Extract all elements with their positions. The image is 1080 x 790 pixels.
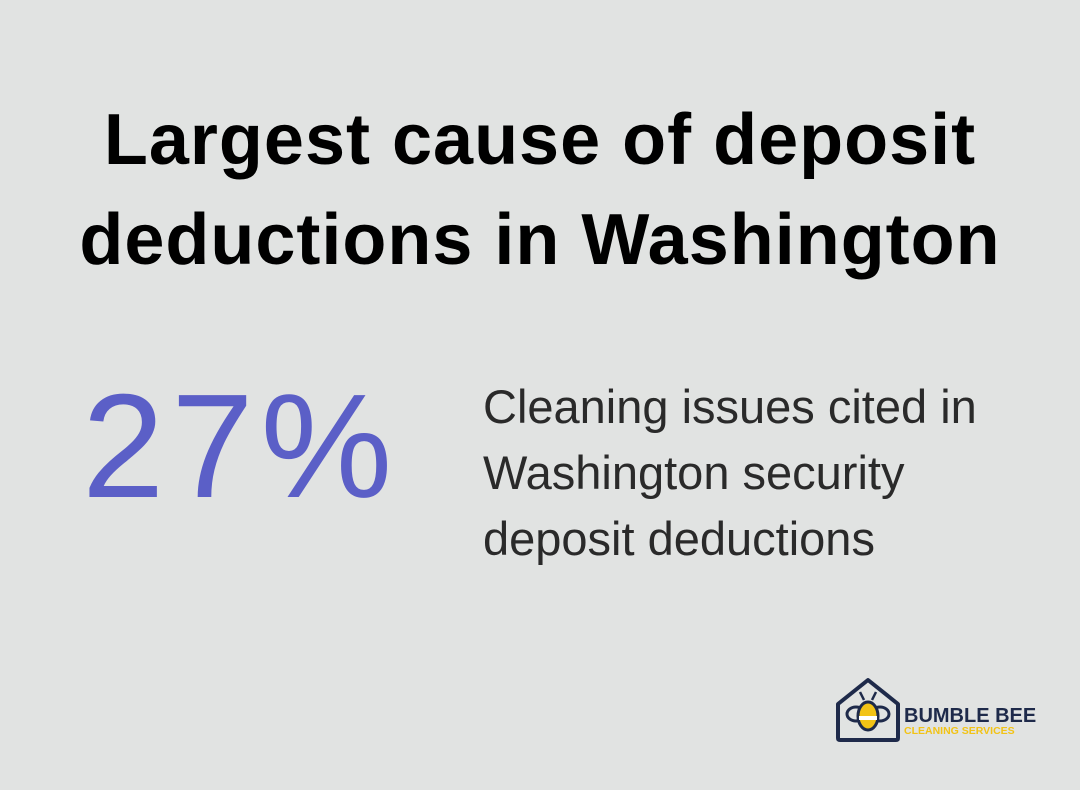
description text (483, 380, 977, 565)
description text: Cleaning issues cited in (483, 380, 977, 433)
title: deductions in Washington (79, 200, 1001, 280)
title (79, 100, 1001, 280)
description text: deposit deductions (483, 512, 875, 565)
logo: Bumble Bee Cleaning Services (836, 678, 1036, 742)
title: Largest cause of deposit (104, 100, 976, 180)
description text: Washington security (483, 446, 904, 499)
logo: Bumble Bee Cleaning Services: CLEANING SERVICES (904, 725, 1015, 737)
statistic: 27%: 27% (82, 364, 399, 529)
logo: Bumble Bee Cleaning Services: BUMBLE BEE (904, 705, 1036, 727)
